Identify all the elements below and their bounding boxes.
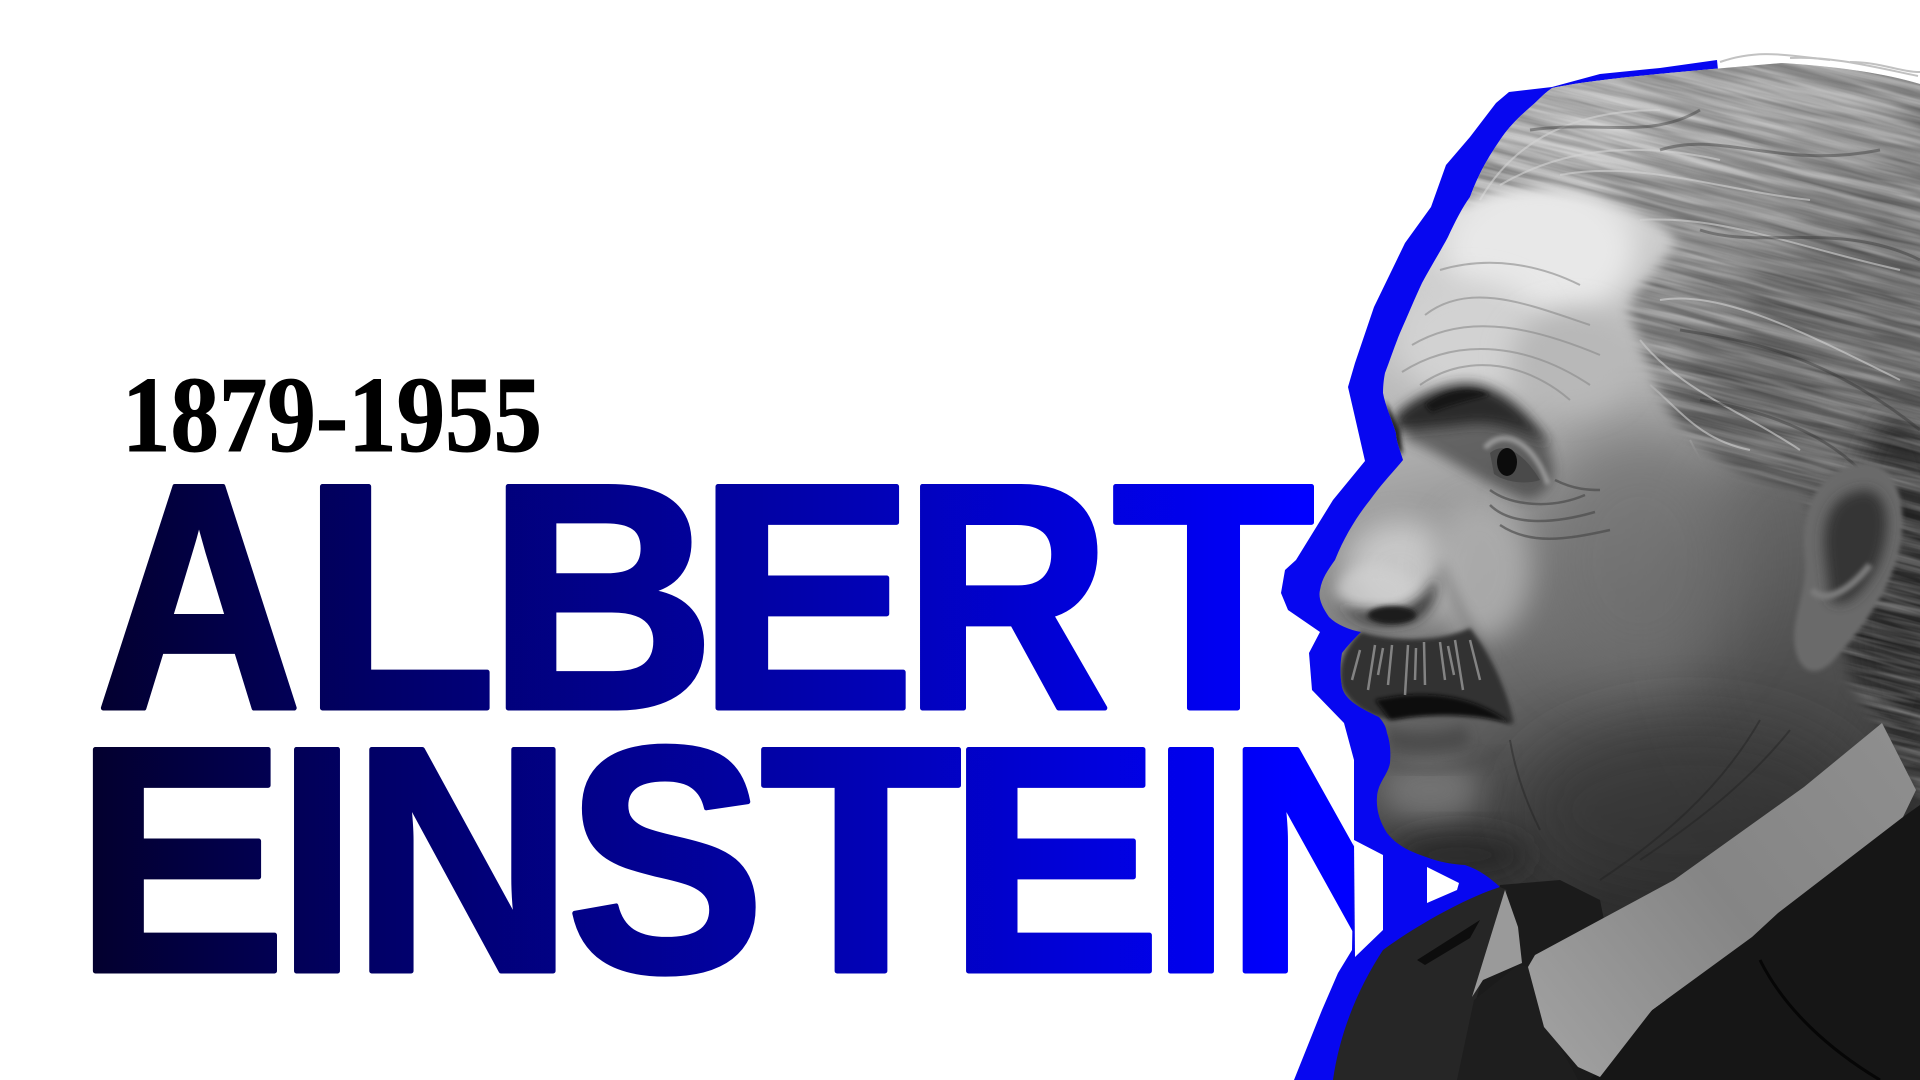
title: ALBERT EINSTEIN (74, 418, 1452, 1040)
title line: EINSTEIN: N (351, 681, 574, 1040)
eye (1490, 448, 1540, 482)
mouth and chin shadow (1385, 725, 1470, 753)
title line: EINSTEIN: E (947, 681, 1162, 1040)
blue silhouette behind portrait (1281, 60, 1720, 1080)
title line: ALBERT: E (696, 418, 916, 777)
title line: EINSTEIN: S (566, 681, 765, 1040)
jacket left (1333, 887, 1507, 1080)
tie (1457, 965, 1578, 1080)
shirt collar (1528, 723, 1916, 1077)
forehead wrinkles (1402, 263, 1600, 400)
hair wisps along the crown (1720, 54, 1920, 76)
dark base under jacket, tie and neck (1457, 880, 1620, 1080)
jacket lapel notch (1417, 920, 1480, 965)
jacket right (1590, 805, 1920, 1080)
ear (1794, 463, 1902, 671)
nose and nostril (1332, 568, 1403, 615)
front collar (1472, 890, 1522, 997)
jaw line and neck creases (1510, 720, 1790, 880)
title line: EINSTEIN: N (1224, 681, 1452, 1040)
title line: ALBERT: A (96, 418, 302, 777)
title line: EINSTEIN: T (760, 681, 962, 1040)
title line: ALBERT: L (301, 418, 497, 777)
portrait of Albert Einstein in profile (1320, 53, 1920, 1080)
eye wrinkles (1490, 480, 1610, 539)
title line: ALBERT: B (487, 418, 716, 777)
years heading: 1879-1955: 1879-1955 (122, 356, 542, 475)
title line: EINSTEIN: E (74, 681, 287, 1040)
title line: ALBERT: R (903, 418, 1111, 777)
hair (1462, 63, 1920, 799)
title line: EINSTEIN: I (1151, 681, 1231, 1040)
title line: ALBERT: T (1112, 418, 1315, 777)
mustache (1341, 628, 1514, 724)
title line: EINSTEIN: I (277, 681, 357, 1040)
skin shading (1704, 462, 1841, 698)
head: face and neck base (1320, 63, 1920, 1000)
hair strands (1480, 110, 1900, 451)
eyebrow (1395, 383, 1550, 445)
eye socket shadow (1405, 397, 1553, 500)
